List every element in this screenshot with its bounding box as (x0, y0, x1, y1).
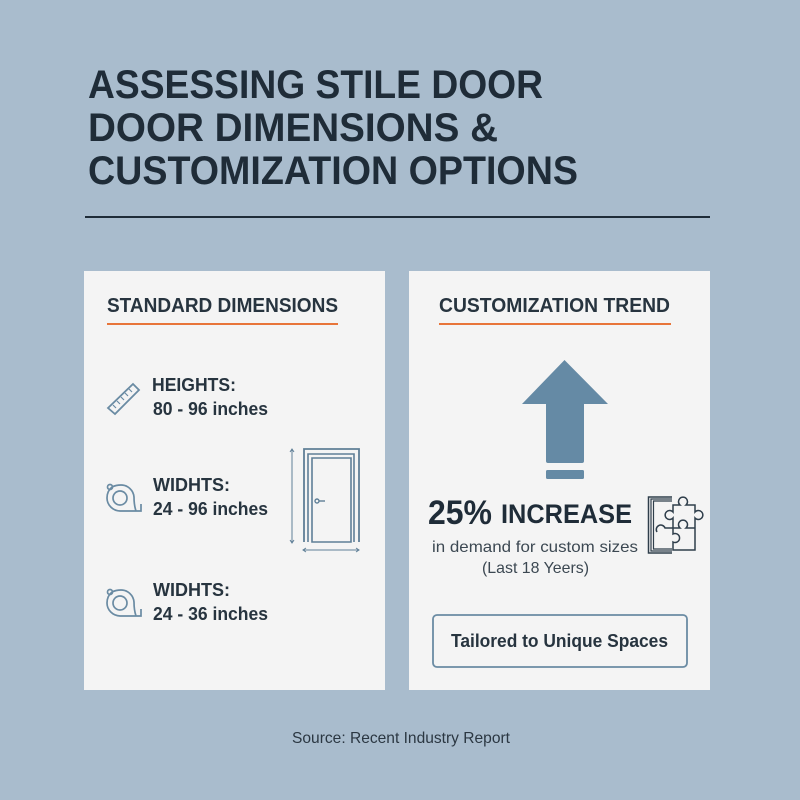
callout: tailored to unique spaces (433, 615, 687, 667)
text: heights (152, 375, 268, 419)
title: DOOR DIMENSIONS & (88, 106, 498, 150)
title: ASSESSING STILE DOOR (88, 63, 543, 107)
stat: 25% increase: INCREASE (501, 499, 632, 529)
title (88, 63, 578, 193)
text: widths: 24 - 36 inches (153, 604, 268, 624)
icon: door diagram (290, 449, 359, 552)
text: widths (153, 580, 268, 624)
text: widths (153, 475, 268, 519)
icon: tape measure (107, 484, 141, 511)
text: widths: WIDHTS: (153, 475, 230, 495)
text: demand description: in demand for custom sizes (432, 539, 638, 556)
icon: up arrow (522, 360, 608, 479)
icon: puzzle (648, 497, 703, 553)
icon: ruler (108, 384, 139, 414)
source note: Source: Recent Industry Report (292, 730, 511, 747)
icon: tape measure (107, 590, 141, 616)
heading: customization trend: CUSTOMIZATION TREND (439, 295, 670, 317)
text: demand description: (Last 18 Yeers) (482, 560, 589, 577)
title: CUSTOMIZATION OPTIONS (88, 149, 578, 193)
text: widths: 24 - 96 inches (153, 499, 268, 519)
panel: standard dimensions (84, 271, 385, 690)
text: widths: WIDHTS: (153, 580, 230, 600)
stat: 25% increase: 25% (428, 494, 492, 532)
text: heights: HEIGHTS: (152, 375, 236, 395)
text: demand description (432, 539, 638, 577)
heading: standard dimensions: STANDARD DIMENSIONS (107, 295, 338, 317)
callout: tailored to unique spaces: Tailored to Unique Spaces (451, 631, 668, 651)
panel: customization trend (409, 271, 710, 690)
text: heights: 80 - 96 inches (153, 399, 268, 419)
stat: 25% increase (428, 494, 632, 532)
